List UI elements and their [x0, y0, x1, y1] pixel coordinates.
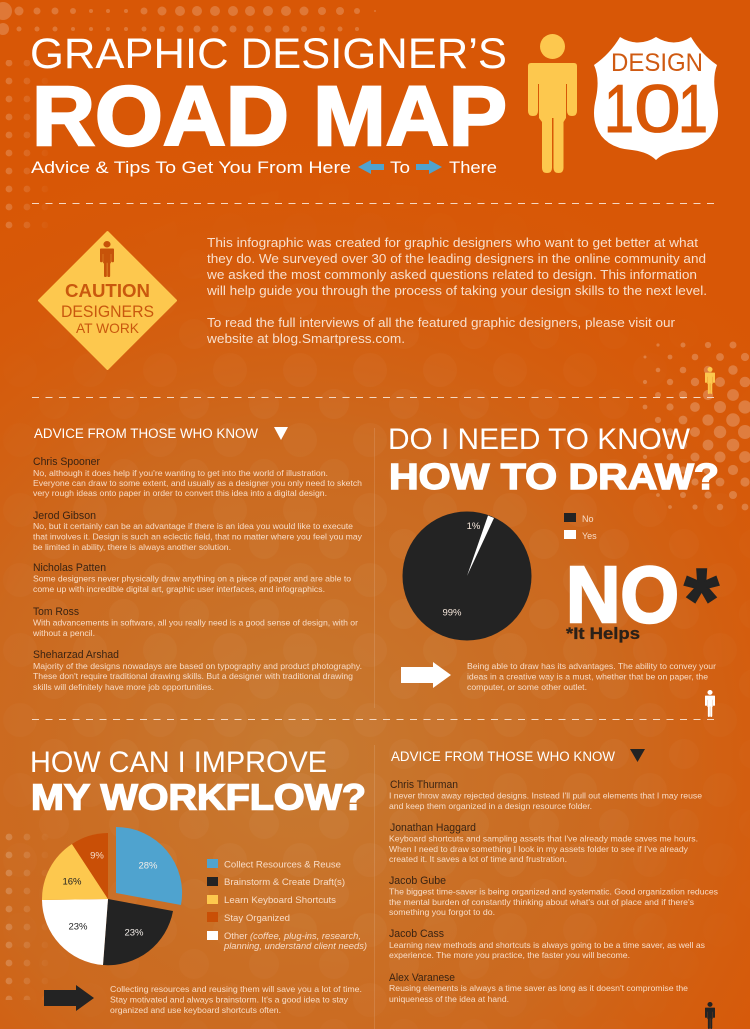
subtitle: Advice & Tips To Get You From Here: [31, 158, 351, 177]
legend: [564, 513, 597, 541]
advice: Jerod Gibson: No, but it certainly can be an advantage if there is an idea you would like to execute: [33, 521, 353, 531]
legend: Yes: [582, 531, 597, 541]
intro text: we asked the most commonly asked questions related to design. This information: [206, 267, 697, 282]
advice: Jacob Cass: experience. The more you practice, the faster you will become.: [389, 950, 630, 960]
icon: small yellow person: [705, 367, 715, 394]
advice: Jonathan Haggard: created it. It saves a lot of time and frustration.: [389, 854, 567, 864]
advice: Chris Thurman: [389, 779, 702, 811]
panel: introduction: [39, 232, 715, 394]
advice: Nicholas Patten: [33, 562, 351, 594]
advice: Jacob Gube: The biggest time-saver is being organized and systematic. Good organization reduces: [389, 886, 719, 896]
intro text: To read the full interviews of all the featured graphic designers, please visit our: [207, 315, 676, 330]
intro text: This infographic was created for graphic designers who want to get better at what: [207, 235, 698, 250]
advice: Sheharzad Arshad: skills will definitely have more job opportunities.: [33, 682, 214, 692]
heading: ADVICE FROM THOSE WHO KNOW: [391, 749, 615, 764]
advice: Tom Ross: [32, 606, 358, 638]
icon: Design 101 highway shield: 1: [604, 71, 634, 147]
pie chart: workflow: 23%: [124, 928, 144, 938]
icon: dark down triangle: [630, 749, 645, 762]
panel: how can I improve my workflow: [30, 746, 367, 1015]
icon: Design 101 highway shield: 0: [634, 71, 681, 147]
pie chart: need to draw: [402, 512, 532, 640]
intro text: [206, 235, 707, 346]
advice: Jerod Gibson: [33, 510, 363, 552]
advice: Jacob Cass: Learning new methods and shortcuts is always going to be a time saver, as well as: [389, 940, 706, 950]
advice: Jonathan Haggard: Keyboard shortcuts and sampling assets that I've already made saves me hours.: [389, 834, 698, 844]
advice: Nicholas Patten: Nicholas Patten: [33, 562, 106, 574]
legend: Learn Keyboard Shortcuts: [224, 895, 336, 905]
advice: Sheharzad Arshad: These don't require traditional drawing skills. But a designer with traditional drawing: [33, 671, 353, 681]
subtitle: [31, 158, 497, 177]
summary text: computer, or some other outlet.: [467, 682, 587, 692]
intro text: will help guide you through the process of taking your design skills to the next level.: [206, 283, 707, 298]
icon: Design 101 highway shield: 1: [678, 71, 708, 147]
icon: Design 101 highway shield: DESIGN: [611, 49, 703, 77]
summary text: [467, 661, 716, 692]
icon: caution sign: CAUTION: [65, 281, 150, 301]
pie chart: need to draw: 99%: [442, 608, 462, 618]
heading line 1: HOW CAN I IMPROVE: [30, 746, 327, 779]
subtitle: To: [390, 158, 410, 177]
heading line 2: MY WORKFLOW?: [31, 776, 366, 818]
icon: yellow person: [528, 34, 577, 173]
advice: Alex Varanese: [389, 972, 688, 1004]
advice: Jacob Gube: the mental burden of constantly thinking about what's out of place and if there's: [389, 897, 695, 907]
legend: Brainstorm & Create Draft(s): [224, 877, 345, 887]
legend: No: [582, 514, 594, 524]
advice: Jonathan Haggard: Jonathan Haggard: [390, 822, 476, 834]
legend: planning, understand client needs): [223, 941, 367, 951]
advice: Jacob Cass: Jacob Cass: [389, 928, 444, 940]
pie chart: need to draw: 1%: [467, 521, 481, 532]
advice: Chris Spooner: [33, 456, 362, 498]
heading: ADVICE FROM THOSE WHO KNOW: [34, 426, 258, 441]
advice: Chris Spooner: very rough ideas onto paper in order to convert this idea into a digital design.: [33, 488, 327, 498]
advice: Jonathan Haggard: When I need to draw something I look in my assets folder to see if I've already: [389, 844, 689, 854]
advice: Chris Spooner: Everyone can draw to some extent, and usually as a designer you only need to sketch: [33, 478, 362, 488]
advice: Nicholas Patten: come up with incredible digital art, graphic user interfaces, and infographics.: [33, 584, 325, 594]
advice: Sheharzad Arshad: Majority of the designs nowadays are based on typography and product photography.: [33, 661, 362, 671]
icon: small dark person: [705, 1002, 715, 1029]
advice: Jacob Gube: Jacob Gube: [389, 875, 446, 887]
intro text: website at blog.Smartpress.com.: [206, 331, 405, 346]
summary text: Stay motivated and always brainstorm. It's a good idea to stay: [110, 994, 349, 1004]
advice: Tom Ross: Tom Ross: [33, 606, 79, 618]
icon: white down triangle: [274, 427, 288, 440]
icon: caution sign: DESIGNERS: [61, 303, 154, 321]
advice: Tom Ross: With advancements in software, all you really need is a good sense of design, with or: [33, 618, 358, 628]
summary text: ideas in a creative way is a must, whether that be on paper, the: [467, 672, 708, 682]
legend: [207, 859, 367, 951]
pie chart: workflow: 23%: [68, 922, 88, 932]
advice: Chris Thurman: Chris Thurman: [390, 779, 458, 791]
advice: Alex Varanese: Reusing elements is always a time saver as long as it doesn't compromise the: [389, 983, 688, 993]
summary text: Being able to draw has its advantages. The ability to convey your: [467, 661, 716, 671]
advice: Jacob Gube: something you forgot to do.: [389, 907, 495, 917]
legend: Collect Resources & Reuse: [224, 860, 341, 870]
panel: advice on drawing: [32, 426, 363, 692]
title line: Graphic Designer's: GRAPHIC DESIGNER’S: [30, 30, 507, 78]
panel: advice on workflow: [389, 749, 719, 1029]
pie chart: workflow: 16%: [62, 876, 82, 888]
big answer: No*: *: [684, 551, 719, 651]
advice: Tom Ross: without a pencil.: [32, 628, 95, 638]
summary text: Collecting resources and reusing them will save you a lot of time.: [110, 984, 362, 994]
title line: Road Map: ROAD MAP: [32, 69, 507, 163]
icon: caution sign: [39, 232, 176, 369]
heading line 1: DO I NEED TO KNOW: [388, 423, 691, 456]
advice: Jerod Gibson: be limited in ability, there is always another solution.: [33, 542, 231, 552]
icon: small white person: [705, 690, 715, 717]
advice: Nicholas Patten: Some designers never physically draw anything on a piece of paper and are able to: [33, 574, 351, 584]
advice: Jerod Gibson: Jerod Gibson: [33, 510, 96, 522]
summary text: [110, 984, 362, 1015]
subtitle: There: [449, 158, 497, 177]
arrow: white: [401, 662, 451, 688]
advice: Chris Thurman: and keep them organized in a design resource folder.: [389, 801, 592, 811]
pie chart: workflow: 28%: [138, 860, 158, 872]
icon: caution sign: AT WORK: [76, 320, 140, 336]
legend: Other (coffee, plug-ins, research,: [224, 931, 361, 941]
advice: Sheharzad Arshad: Sheharzad Arshad: [33, 649, 119, 661]
advice: Jacob Cass: [389, 928, 706, 960]
pie chart: workflow: [42, 827, 182, 965]
big answer: No*: [566, 550, 719, 651]
advice: Jerod Gibson: that involves it. Design is such an eclectic field, that no matter where you feel you may: [33, 532, 363, 542]
legend: Stay Organized: [224, 913, 290, 923]
advice: Alex Varanese: uniqueness of the idea at hand.: [389, 994, 509, 1004]
advice: Chris Spooner: Chris Spooner: [33, 456, 100, 468]
arrow: dark: [44, 985, 94, 1011]
advice: Chris Spooner: No, although it does help if you're wanting to get into the world of illustration.: [33, 468, 328, 478]
advice: Chris Thurman: I never throw away rejected designs. Instead I'll pull out elements that I may reuse: [389, 790, 702, 800]
advice: Jacob Gube: [389, 875, 719, 917]
footnote: it helps: *It Helps: [566, 625, 640, 643]
summary text: organized and use keyboard shortcuts often.: [110, 1005, 281, 1015]
intro text: they do. We surveyed over 30 of the leading designers in the online community and: [207, 251, 706, 266]
icon: Design 101 highway shield: [594, 37, 718, 160]
heading line 2: HOW TO DRAW?: [389, 456, 719, 497]
pie chart: workflow: 9%: [90, 850, 104, 862]
big answer: No*: NO: [566, 550, 679, 639]
advice: Alex Varanese: Alex Varanese: [389, 972, 455, 984]
advice: Sheharzad Arshad: [33, 649, 362, 692]
advice: Jonathan Haggard: [389, 822, 698, 864]
header: [30, 30, 718, 177]
panel: do I need to know how to draw: [388, 423, 719, 717]
